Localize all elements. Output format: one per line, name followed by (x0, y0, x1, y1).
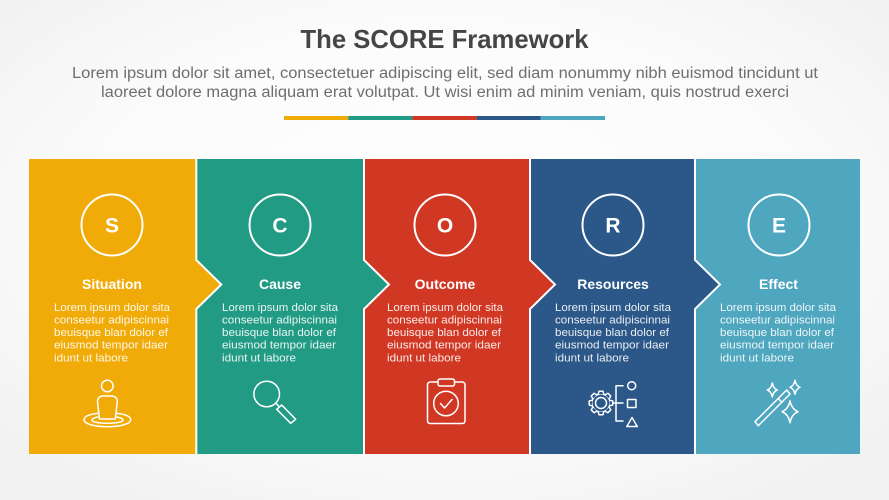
body text: Resources: idunt ut labore (555, 352, 629, 364)
body text: Resources: Lorem ipsum dolor sita (555, 302, 672, 314)
body text: Effect: idunt ut labore (720, 352, 794, 364)
colored divider bar (284, 116, 605, 120)
heading: Effect: Effect (759, 276, 798, 292)
icon circle: O (414, 194, 476, 256)
body text: Cause: eiusmod tempor idaer (222, 340, 336, 352)
icon circle: R (582, 194, 644, 256)
body text: Outcome: conseetur adipiscinnai (387, 314, 502, 326)
icon: magic wand (755, 380, 800, 426)
subtitle text: Lorem ipsum dolor sit amet, consectetuer adipiscing elit, sed diam nonummy nibh euismod tincidunt ut (72, 65, 819, 82)
body text: Resources: beuisque blan dolor ef (555, 327, 670, 339)
panel background: Effect (690, 159, 860, 454)
letter: S: S (105, 214, 119, 238)
body text: Outcome: Lorem ipsum dolor sita (387, 302, 504, 314)
panel background: Situation (29, 159, 221, 454)
body text: Situation (54, 302, 171, 364)
panel background: Cause (192, 159, 389, 454)
panel: Outcome (360, 159, 555, 454)
letter: R: R (605, 214, 621, 238)
body text: Effect: conseetur adipiscinnai (720, 314, 835, 326)
body text: Resources: conseetur adipiscinnai (555, 314, 670, 326)
body text: Effect: beuisque blan dolor ef (720, 327, 835, 339)
body text: Outcome: beuisque blan dolor ef (387, 327, 502, 339)
body text: Cause: idunt ut labore (222, 352, 296, 364)
body text: Cause: conseetur adipiscinnai (222, 314, 337, 326)
body text: Effect: Lorem ipsum dolor sita (720, 302, 837, 314)
panel: Resources (525, 159, 720, 454)
icon circle: C (250, 194, 310, 256)
body text: Situation: conseetur adipiscinnai (54, 314, 169, 326)
body text: Cause (222, 302, 339, 364)
body text: Situation: Lorem ipsum dolor sita (54, 302, 171, 314)
icon: gear with shapes (589, 382, 637, 426)
body text: Outcome: eiusmod tempor idaer (387, 340, 501, 352)
body text: Effect: eiusmod tempor idaer (720, 340, 834, 352)
heading: Resources: Resources (577, 276, 649, 292)
body text: Cause: Lorem ipsum dolor sita (222, 302, 339, 314)
title: The SCORE Framework (300, 24, 589, 54)
panel: Cause (192, 159, 389, 454)
icon: clipboard check (428, 379, 465, 424)
body text: Outcome: idunt ut labore (387, 352, 461, 364)
body text: Cause: beuisque blan dolor ef (222, 327, 337, 339)
panel: Situation (29, 159, 221, 454)
icon circle: S (82, 194, 142, 256)
body text: Resources: eiusmod tempor idaer (555, 340, 669, 352)
icon: magnifying glass (254, 381, 296, 423)
heading: Situation: Situation (82, 276, 142, 292)
body text: Outcome (387, 302, 504, 364)
panel background: Outcome (360, 159, 555, 454)
subtitle text (72, 65, 819, 101)
icon circle: E (748, 194, 810, 256)
body text: Situation: idunt ut labore (54, 352, 128, 364)
heading: Cause: Cause (259, 276, 301, 292)
heading: Outcome: Outcome (415, 276, 476, 292)
panel background: Resources (525, 159, 720, 454)
body text: Effect (720, 302, 837, 364)
body text: Situation: beuisque blan dolor ef (54, 327, 169, 339)
letter: C: C (272, 214, 288, 238)
panel: Effect (690, 159, 860, 454)
letter: O: O (437, 214, 453, 238)
body text: Resources (555, 302, 672, 364)
letter: E: E (772, 214, 786, 238)
subtitle text: laoreet dolore magna aliquam erat volutpat. Ut wisi enim ad minim veniam, quis nostrud exerci (101, 84, 789, 101)
body text: Situation: eiusmod tempor idaer (54, 340, 168, 352)
icon: person on target (84, 380, 131, 427)
